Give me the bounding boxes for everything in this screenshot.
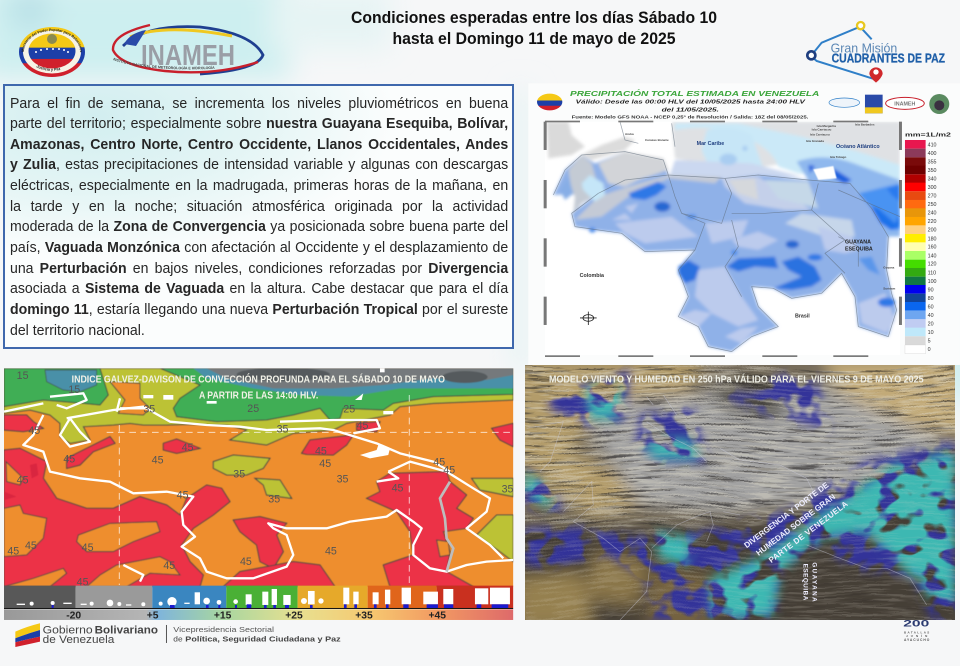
white boundaries: [4, 393, 513, 582]
panel: forecast text: parte del territorio; especialmente sobre nuestra Guayana Esequiba, Bolívar,: [10, 115, 508, 132]
map labels: Isla Tobago: [830, 155, 847, 159]
map labels: Brasil: [795, 314, 810, 320]
panel heading: MODELO VIENTO Y HUMEDAD EN 250 hPa VÁLIDO PARA EL VIERNES 9 DE MAYO 2025: [549, 375, 924, 386]
coastlines: [527, 395, 927, 620]
contour values: 35: [502, 483, 514, 495]
footer: government logo: Vicepresidencia Sectorial: [173, 625, 274, 634]
precipitation legend: 110: [928, 270, 936, 276]
panel: forecast text: [3, 84, 514, 349]
annotation: divergence: PARTE DE VENEZUELA: [767, 499, 850, 565]
contour values: 35: [233, 469, 245, 481]
contour values: 35: [277, 423, 289, 435]
convection colour scale: +5: [147, 610, 159, 621]
precipitation legend: 0: [928, 347, 931, 353]
precipitation legend: 340: [928, 176, 937, 182]
lower dark continent: [510, 445, 960, 632]
logo: ministry seal: [19, 27, 85, 77]
panel: forecast text: la tarde y en la noche; situación atmosférica originada por la actividad: [10, 198, 508, 215]
precipitation legend: 120: [928, 262, 937, 268]
map labels: Aruba: [625, 132, 634, 136]
map labels: GUAYANA: [845, 239, 871, 245]
contour values: 45: [315, 445, 327, 457]
map labels: Isla Granada: [806, 139, 824, 143]
map labels: [580, 122, 896, 320]
contour values: 35: [143, 403, 155, 415]
precipitation legend: 100: [928, 279, 937, 285]
orange holes in red: [4, 462, 450, 587]
map compass: [580, 312, 597, 325]
panel: forecast text: del territorio nacional.: [10, 322, 145, 339]
contour values: 45: [443, 464, 455, 476]
contour values: [7, 370, 514, 589]
precipitation legend: 250: [928, 202, 937, 208]
contour values: 45: [240, 556, 252, 568]
precipitation legend: 410: [928, 142, 937, 148]
contour values: 25: [343, 403, 355, 415]
logo: INAMEH: [112, 24, 264, 76]
precipitation legend: 80: [928, 296, 934, 302]
precipitation legend: 40: [928, 313, 934, 319]
footer: government logo: [15, 623, 341, 647]
panel: forecast text: domingo 11, estaría llegando una nueva Perturbación Tropical por el sureste: [10, 301, 508, 318]
map labels: Colombia: [580, 273, 604, 279]
top fields: [4, 368, 513, 445]
convection colour scale: [4, 586, 513, 621]
footer: bicentennial logo: BATALLAS: [904, 630, 929, 634]
panel: forecast text: eléctricas, especialmente en la madrugada, primeras horas de la mañana, en: [10, 177, 508, 194]
panel: precipitation map: [528, 87, 960, 365]
contour values: 45: [357, 420, 369, 432]
precipitation legend: 20: [928, 322, 934, 328]
map header: INAMEH: [894, 102, 915, 108]
convection colour scale: +35: [355, 610, 373, 621]
map heading: [72, 374, 445, 402]
footer: government logo: Gobierno: [43, 625, 93, 637]
contour values: 25: [247, 403, 259, 415]
annotation: Guayana Esequiba: [801, 562, 817, 602]
contour values: 45: [25, 540, 37, 552]
contour values: 45: [182, 442, 194, 454]
heavy rain cells: [628, 182, 667, 200]
panel: wind and humidity 250 hPa map: [525, 365, 955, 620]
river: [440, 482, 453, 572]
map labels: Océano Atlántico: [836, 144, 880, 150]
panel: forecast text: moderada de la Zona de Convergencia ya posicionada sobre buena parte del: [10, 218, 508, 235]
logo: INAMEH: INAMEH: [141, 40, 235, 72]
humidity teal field: [525, 385, 955, 620]
precipitation legend: 160: [928, 245, 937, 251]
precipitation legend: 140: [928, 253, 937, 259]
title: hasta el Domingo 11 de mayo de 2025: [392, 30, 676, 48]
map labels: Guyana: [883, 266, 895, 270]
Venezuela rainfall polygon: [553, 152, 897, 352]
map labels: Isla Margarita: [817, 124, 836, 128]
precipitation legend: 5: [928, 339, 931, 345]
contour values: 45: [319, 458, 331, 470]
convection colour scale: -20: [66, 610, 81, 621]
map labels: Isla Carriacou: [812, 128, 832, 132]
annotation: divergence: [744, 482, 848, 563]
contour values: 45: [177, 489, 189, 501]
panel: Galvez-Davison convection index map: [4, 368, 514, 620]
footer: government logo: de: [173, 635, 183, 644]
logo: ministry seal: Justicia y Paz: [36, 65, 60, 72]
annotation: Guayana Esequiba: GUAYANA: [810, 562, 817, 602]
contour values: 15: [68, 384, 80, 396]
map heading: INDICE GALVEZ-DAVISON DE CONVECCIÓN PROFUNDA PARA EL SÁBADO 10 DE MAYO: [72, 374, 445, 386]
precipitation legend: 90: [928, 287, 934, 293]
map labels: Isla Barbados: [855, 122, 875, 126]
convection colour scale: +25: [285, 610, 303, 621]
contour values: 45: [433, 457, 445, 469]
precipitation legend: mm=1L/m2: [905, 132, 951, 138]
title: Condiciones esperadas entre los días Sábado 10: [351, 9, 717, 27]
map header: [537, 89, 949, 120]
contour values: 45: [152, 455, 164, 467]
convection colour scale: +45: [429, 610, 446, 621]
map header: PRECIPITACIÓN TOTAL ESTIMADA EN VENEZUELA: [570, 89, 819, 98]
precipitation legend: 400: [928, 151, 937, 157]
precipitation legend: 200: [928, 228, 937, 234]
precipitation legend: 270: [928, 194, 937, 200]
map labels: Mar Caribe: [697, 141, 724, 147]
title: [351, 9, 717, 48]
contour values: 45: [325, 545, 337, 557]
precipitation legend: 355: [928, 159, 937, 165]
map labels: Curazao Bonaire: [645, 138, 669, 142]
panel: forecast text: asociada a Sistema de Vaguada en la altura. Cabe destacar que para el día: [10, 280, 508, 297]
map labels: Surinam: [883, 286, 896, 290]
map labels: Isla Carriacou: [810, 132, 830, 136]
precipitation legend: 220: [928, 219, 937, 225]
convection colour scale: +15: [214, 610, 232, 621]
footer: government logo: Política, Seguridad Ciudadana y Paz: [185, 635, 341, 644]
annotation: divergence: HUMEDAD SOBRE GRAN: [754, 492, 837, 558]
panel: forecast text: país, Vaguada Monzónica con afectación al Occidente y el desplazamiento de: [10, 239, 508, 256]
precipitation legend: 180: [928, 236, 937, 242]
panel: forecast text: y Zulia, estas precipitaciones de intensidad variable y algunas con descargas: [10, 156, 508, 173]
precipitation legend: 10: [928, 330, 934, 336]
map header: del 11/05/2025.: [662, 108, 720, 114]
contour values: 45: [163, 560, 175, 572]
map heading: A PARTIR DE LAS 14:00 HLV.: [199, 391, 319, 402]
contour values: 45: [82, 542, 94, 554]
contour values: 15: [17, 370, 29, 382]
humidity blue field: [525, 368, 955, 620]
footer: government logo: Bolivariano: [95, 625, 158, 637]
map labels: ESEQUIBA: [845, 246, 873, 252]
precipitation legend: [905, 132, 951, 354]
contour values: 45: [63, 454, 75, 466]
contour values: 45: [392, 483, 404, 495]
precipitation legend: 350: [928, 168, 937, 174]
yellow-green blobs: [213, 455, 513, 562]
footer: bicentennial logo: JUNÍN: [906, 633, 927, 638]
precipitation legend: 300: [928, 185, 937, 191]
contour values: 45: [77, 577, 89, 589]
panel: forecast text: Para el fin de semana, se incrementa los niveles pluviométricos en buena: [10, 95, 508, 112]
panel: forecast text: Amazonas, Centro Norte, Centro Occidente, Llanos Occidentales, Andes: [10, 136, 508, 153]
precipitation legend: 60: [928, 304, 934, 310]
footer: government logo: de Venezuela: [43, 634, 115, 646]
map header: Válido: Desde las 00:00 HLV del 10/05/2025 hasta 24:00 HLV: [576, 100, 807, 106]
annotation: Guayana Esequiba: ESEQUIBA: [801, 564, 808, 601]
panel: forecast text: una Perturbación en bajos niveles, condiciones reforzadas por Divergencia: [10, 260, 508, 277]
state boundaries: [553, 122, 900, 352]
logo: INAMEH: INSTITUTO NACIONAL DE METEOROLOGÍA E HIDROLOGÍA: [113, 58, 215, 70]
map base and land: [545, 122, 900, 355]
precipitation legend: 240: [928, 211, 937, 217]
contour values: 35: [337, 473, 349, 485]
logo: Gran Misión Cuadrantes de Paz: Gran Misión: [831, 41, 897, 56]
map header: Fuente: Modelo GFS NOAA - NCEP 0,25° de Resolución / Salida: 18Z del 08/05/2025.: [572, 115, 808, 120]
contour values: 35: [268, 493, 280, 505]
contour values: 45: [7, 545, 19, 557]
footer: bicentennial logo: 200: [903, 619, 929, 629]
contour values: 45: [28, 425, 40, 437]
logo: Gran Misión Cuadrantes de Paz: [806, 20, 945, 83]
contour values: 45: [17, 474, 29, 486]
map frame ticks: [544, 121, 902, 357]
annotation: divergence: DIVERGENCIA Y PORTE DE: [742, 480, 831, 550]
footer: bicentennial logo: AYACUCHO: [904, 638, 930, 642]
red fields: [4, 415, 513, 587]
